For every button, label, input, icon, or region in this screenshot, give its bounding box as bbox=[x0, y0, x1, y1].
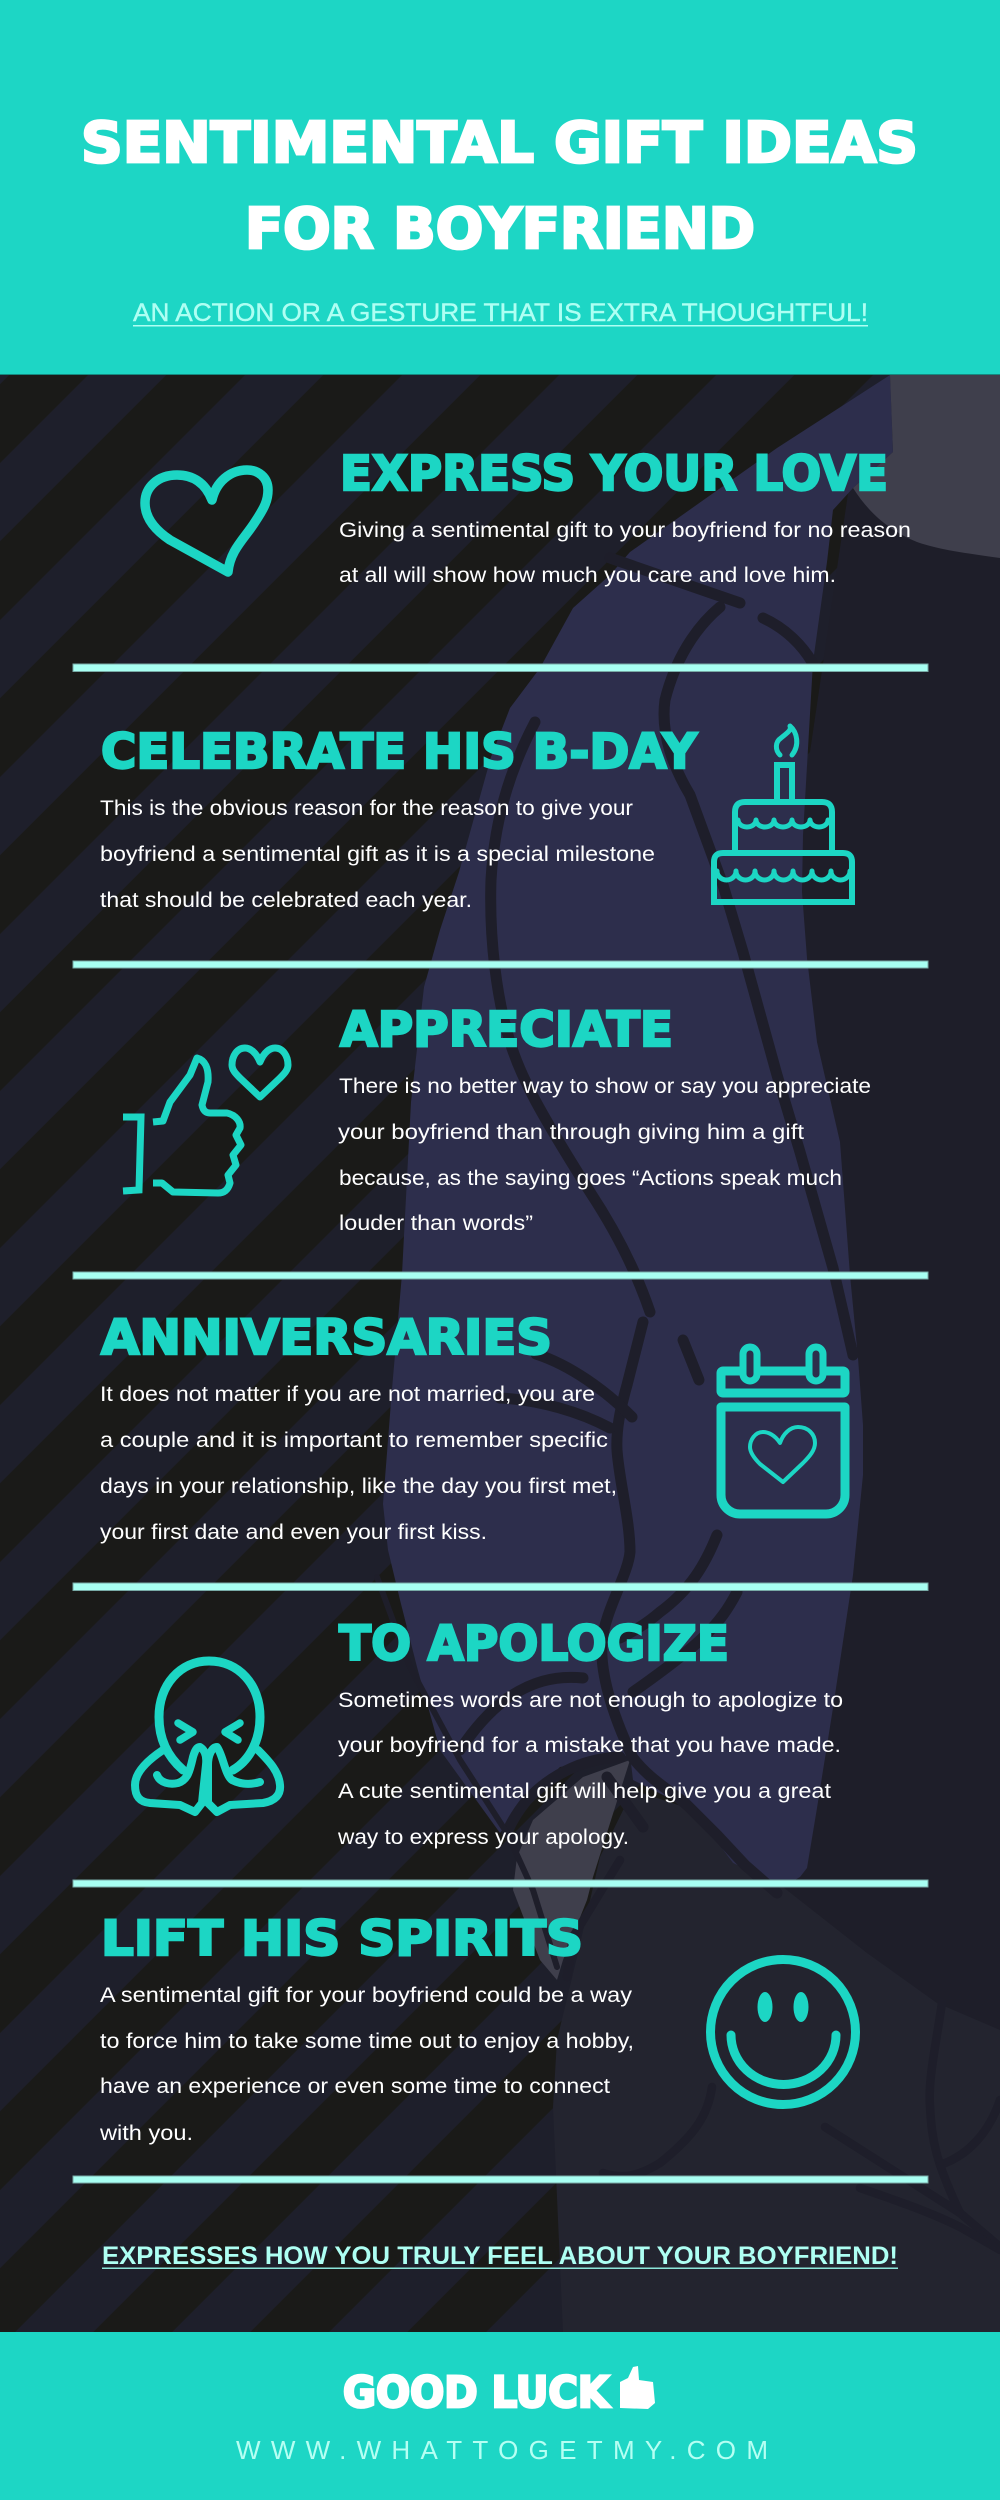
panel: celebrate his b-day bbox=[100, 724, 852, 912]
body text: It does not matter if you are not married, you are bbox=[100, 1383, 595, 1406]
body text bbox=[338, 1075, 871, 1235]
icon: birthday cake bbox=[714, 726, 852, 902]
panel: appreciate bbox=[123, 1002, 871, 1235]
heading: ANNIVERSARIES bbox=[101, 1310, 552, 1366]
body text: your first date and even your first kiss. bbox=[100, 1521, 487, 1544]
closing callout: EXPRESSES HOW YOU TRULY FEEL ABOUT YOUR BOYFRIEND! bbox=[102, 2242, 898, 2270]
body text: have an experience or even some time to connect bbox=[100, 2075, 610, 2098]
body text: Sometimes words are not enough to apologize to bbox=[338, 1689, 843, 1712]
body text: with you. bbox=[99, 2122, 193, 2145]
icon: calendar with heart bbox=[721, 1347, 845, 1514]
heading: CELEBRATE HIS B-DAY bbox=[101, 724, 698, 780]
icon: thumbs up with heart bbox=[123, 1048, 288, 1193]
panel: to apologize bbox=[135, 1616, 843, 1849]
heading: TO APOLOGIZE bbox=[339, 1616, 729, 1672]
body text: days in your relationship, like the day you first met, bbox=[100, 1475, 617, 1498]
website url: WWW.WHATTOGETMY.COM bbox=[236, 2435, 768, 2465]
body text: your boyfriend for a mistake that you have made. bbox=[338, 1734, 841, 1757]
body text: at all will show how much you care and love him. bbox=[339, 564, 836, 587]
body text bbox=[339, 519, 911, 587]
body text: to force him to take some time out to enjoy a hobby, bbox=[100, 2030, 634, 2053]
panel: lift his spirits bbox=[99, 1911, 856, 2145]
icon: apologizing figure bbox=[135, 1661, 280, 1812]
subtitle: AN ACTION OR A GESTURE THAT IS EXTRA THOUGHTFUL! bbox=[133, 299, 868, 327]
body text: because, as the saying goes “Actions speak much bbox=[339, 1167, 842, 1190]
panel: anniversaries bbox=[100, 1310, 845, 1544]
body text bbox=[100, 797, 655, 912]
panel: express your love bbox=[145, 446, 911, 587]
heading: EXPRESS YOUR LOVE bbox=[340, 446, 888, 502]
body text: A cute sentimental gift will help give you a great bbox=[338, 1780, 831, 1803]
good luck: GOOD LUCK bbox=[343, 2368, 611, 2418]
body text: your boyfriend than through giving him a gift bbox=[338, 1121, 804, 1144]
body text: way to express your apology. bbox=[337, 1826, 629, 1849]
title: FOR BOYFRIEND bbox=[245, 197, 755, 262]
body text: louder than words” bbox=[339, 1212, 533, 1235]
body text: This is the obvious reason for the reason to give your bbox=[100, 797, 633, 820]
icon: smiley face bbox=[710, 1960, 856, 2104]
heading: APPRECIATE bbox=[340, 1002, 673, 1058]
title: SENTIMENTAL GIFT IDEAS bbox=[81, 111, 918, 176]
header band bbox=[0, 0, 1000, 375]
body text: a couple and it is important to remember specific bbox=[100, 1429, 608, 1452]
body text: that should be celebrated each year. bbox=[100, 889, 472, 912]
body text bbox=[99, 1984, 634, 2145]
footer band bbox=[0, 2332, 1000, 2500]
body text bbox=[337, 1689, 843, 1849]
title bbox=[81, 111, 918, 262]
body text bbox=[100, 1383, 617, 1544]
body text: boyfriend a sentimental gift as it is a special milestone bbox=[100, 843, 655, 866]
icon: thumbs up bbox=[620, 2366, 655, 2409]
body text: A sentimental gift for your boyfriend could be a way bbox=[100, 1984, 633, 2007]
heading: LIFT HIS SPIRITS bbox=[101, 1911, 583, 1967]
body text: Giving a sentimental gift to your boyfriend for no reason bbox=[339, 519, 911, 542]
body text: There is no better way to show or say you appreciate bbox=[339, 1075, 871, 1098]
background: dark striped panel with silhouette bbox=[0, 375, 1000, 2332]
icon: heart bbox=[145, 470, 268, 572]
